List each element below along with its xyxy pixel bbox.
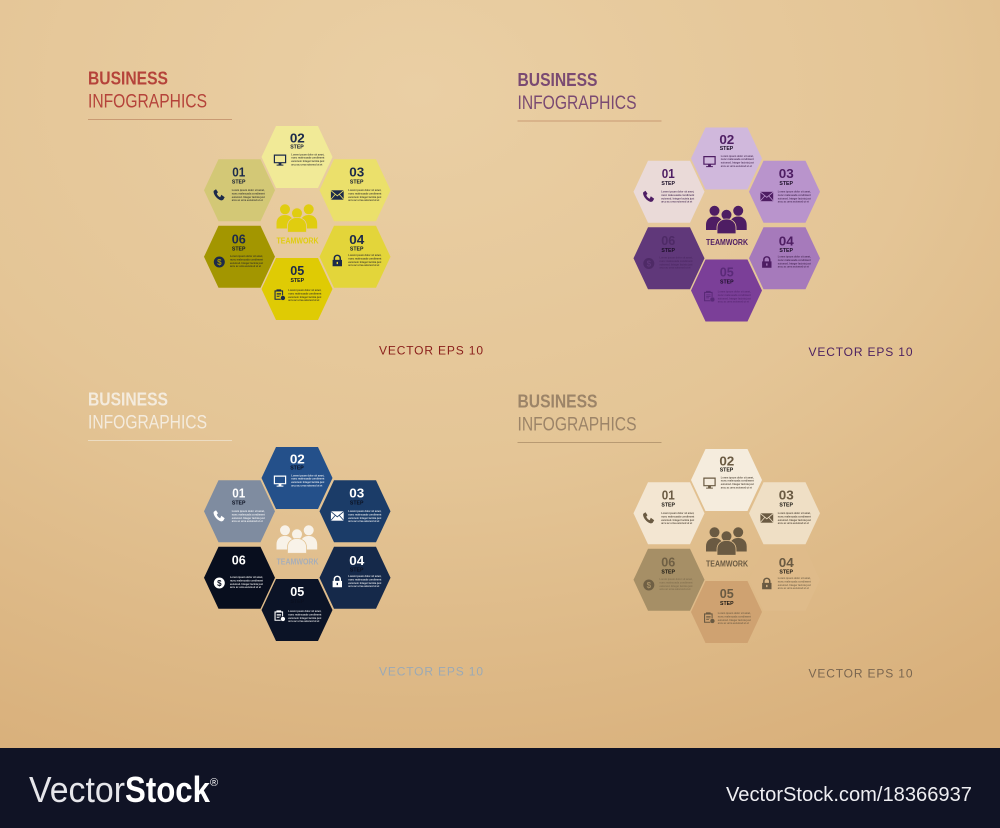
step 01 hexagon <box>204 159 275 221</box>
step 04 hexagon: euismod. Integer lacinia just <box>778 583 811 587</box>
step 01 hexagon: 01 <box>232 165 245 180</box>
icon: teamwork people <box>276 204 317 232</box>
heading: tan business infographics: INFOGRAPHICS <box>518 414 636 436</box>
step 05 hexagon <box>691 260 762 322</box>
step 05 hexagon <box>691 581 762 643</box>
step 02 hexagon: Lorem ipsum dolor sit amet, <box>721 475 754 479</box>
step 04 hexagon: nunc malesuada condiment <box>778 258 811 262</box>
step 04 hexagon: 04 <box>779 555 794 570</box>
step 06 hexagon: euismod. Integer lacinia just <box>230 582 263 586</box>
step 05 hexagon: euismod. Integer lacinia just <box>288 295 321 299</box>
step 03 hexagon <box>320 480 390 542</box>
step 03 hexagon: STEP <box>779 181 794 187</box>
step 02 hexagon <box>262 447 332 509</box>
step 03 hexagon: 03 <box>349 486 364 501</box>
step 05 hexagon: nunc malesuada condiment <box>718 293 751 297</box>
step 03 hexagon: arcu ac urna euismod ut et <box>348 198 379 202</box>
step 02 hexagon: nunc malesuada condiment <box>291 477 324 481</box>
step 06 hexagon: Lorem ipsum dolor sit amet, <box>660 255 693 259</box>
step 03 hexagon: nunc malesuada condiment <box>778 514 811 518</box>
step 06 hexagon <box>634 227 704 289</box>
step 03 hexagon: STEP <box>350 179 364 185</box>
heading: purple business infographics: INFOGRAPHICS <box>518 93 636 114</box>
step 06 hexagon: $ <box>647 581 652 590</box>
step 02 hexagon: euismod. Integer lacinia just <box>291 480 324 484</box>
panel: purple infographic <box>518 70 913 359</box>
step 01 hexagon: 01 <box>662 488 675 503</box>
caption: vector eps 10: VECTOR EPS 10 <box>379 664 483 678</box>
caption: vector eps 10: VECTOR EPS 10 <box>379 344 483 358</box>
step 05 hexagon: nunc malesuada condiment <box>718 614 751 618</box>
step 04 hexagon <box>749 227 820 289</box>
step 04 hexagon: arcu ac urna euismod ut et <box>348 263 379 267</box>
step 04 hexagon: STEP <box>350 567 364 573</box>
step 04 hexagon: euismod. Integer lacinia just <box>348 581 381 585</box>
step 06 hexagon <box>204 226 275 288</box>
step 04 hexagon: 04 <box>779 233 794 248</box>
step 02 hexagon: 02 <box>290 131 305 146</box>
step 02 hexagon: 02 <box>290 452 305 467</box>
step 01 hexagon: nunc malesuada condiment <box>661 193 694 197</box>
step 06 hexagon: nunc malesuada condiment <box>660 259 692 263</box>
step 06 hexagon <box>204 547 275 609</box>
heading: yellow business infographics <box>88 68 232 120</box>
step 04 hexagon: euismod. Integer lacinia just <box>348 260 381 264</box>
step 05 hexagon: arcu ac urna euismod ut et <box>288 298 319 302</box>
step 03 hexagon: 03 <box>349 165 364 180</box>
step 06 hexagon: euismod. Integer lacinia just <box>660 262 692 266</box>
step 01 hexagon: euismod. Integer lacinia just <box>232 516 265 520</box>
step 05 hexagon: 05 <box>720 264 734 280</box>
step 04 hexagon: Lorem ipsum dolor sit amet, <box>348 253 381 257</box>
step 01 hexagon: arcu ac urna euismod ut et <box>232 519 263 523</box>
step 03 hexagon: Lorem ipsum dolor sit amet, <box>778 190 811 194</box>
step 05 hexagon <box>262 258 332 320</box>
step 03 hexagon: STEP <box>779 502 794 508</box>
step 02 hexagon: euismod. Integer lacinia just <box>721 482 754 486</box>
step 01 hexagon: STEP <box>661 181 676 187</box>
step 06 hexagon: arcu ac urna euismod ut et <box>230 585 261 589</box>
heading: yellow business infographics: INFOGRAPHICS <box>88 92 207 112</box>
icon: teamwork people <box>706 527 747 555</box>
step 01 hexagon: 01 <box>662 166 675 181</box>
step 02 hexagon: euismod. Integer lacinia just <box>721 161 754 165</box>
step 05 hexagon: euismod. Integer lacinia just <box>288 616 321 620</box>
step 05 hexagon: nunc malesuada condiment <box>288 291 321 295</box>
step 03 hexagon: euismod. Integer lacinia just <box>778 196 811 200</box>
icon: teamwork people <box>706 206 747 234</box>
caption: vector eps 10: VECTOR EPS 10 <box>808 345 913 359</box>
step 01 hexagon: euismod. Integer lacinia just <box>661 518 694 522</box>
logo: vectorstock: Stock <box>125 769 211 810</box>
label: teamwork: TEAMWORK <box>276 236 319 245</box>
logo: vectorstock: Vector <box>29 769 125 810</box>
step 03 hexagon <box>749 161 820 223</box>
step 04 hexagon: arcu ac urna euismod ut et <box>348 584 379 588</box>
step 02 hexagon: nunc malesuada condiment <box>721 157 754 161</box>
step 01 hexagon: Lorem ipsum dolor sit amet, <box>232 188 265 192</box>
step 06 hexagon: arcu ac urna euismod ut et <box>660 587 690 591</box>
step 03 hexagon: Lorem ipsum dolor sit amet, <box>348 509 381 513</box>
step 06 hexagon: euismod. Integer lacinia just <box>660 584 692 588</box>
step 06 hexagon: STEP <box>661 248 676 254</box>
step 02 hexagon: arcu ac urna euismod ut et <box>721 486 752 490</box>
step 02 hexagon: nunc malesuada condiment <box>291 156 324 160</box>
step 06 hexagon: arcu ac urna euismod ut et <box>230 264 261 268</box>
step 02 hexagon: arcu ac urna euismod ut et <box>721 164 752 168</box>
step 03 hexagon: nunc malesuada condiment <box>348 191 381 195</box>
step 01 hexagon: euismod. Integer lacinia just <box>661 196 694 200</box>
step 03 hexagon: euismod. Integer lacinia just <box>348 195 381 199</box>
step 03 hexagon: arcu ac urna euismod ut et <box>778 200 809 204</box>
heading: tan business infographics <box>518 392 662 443</box>
step 02 hexagon: Lorem ipsum dolor sit amet, <box>721 154 754 158</box>
step 05 hexagon: 05 <box>290 584 304 599</box>
step 06 hexagon: 06 <box>661 554 675 569</box>
step 01 hexagon: STEP <box>661 502 676 508</box>
step 04 hexagon <box>749 549 820 611</box>
step 04 hexagon: 04 <box>349 232 365 247</box>
logo: vectorstock: ® <box>210 777 218 789</box>
step 02 hexagon: euismod. Integer lacinia just <box>291 159 324 163</box>
step 05 hexagon: Lorem ipsum dolor sit amet, <box>288 609 321 613</box>
step 01 hexagon: arcu ac urna euismod ut et <box>232 198 263 202</box>
step 02 hexagon: arcu ac urna euismod ut et <box>291 484 322 488</box>
step 04 hexagon: nunc malesuada condiment <box>348 577 381 581</box>
step 01 hexagon: Lorem ipsum dolor sit amet, <box>661 511 694 515</box>
step 05 hexagon: Lorem ipsum dolor sit amet, <box>718 290 751 294</box>
step 06 hexagon: nunc malesuada condiment <box>230 257 263 261</box>
step 03 hexagon: euismod. Integer lacinia just <box>348 516 381 520</box>
step 03 hexagon: STEP <box>350 500 364 506</box>
heading: tan business infographics: BUSINESS <box>518 392 598 412</box>
step 06 hexagon: $ <box>217 258 222 267</box>
step 04 hexagon: STEP <box>779 248 794 254</box>
step 06 hexagon: Lorem ipsum dolor sit amet, <box>660 577 693 581</box>
step 01 hexagon: STEP <box>232 179 246 185</box>
step 01 hexagon: nunc malesuada condiment <box>232 191 265 195</box>
step 06 hexagon: $ <box>217 579 222 588</box>
heading: yellow business infographics: BUSINESS <box>88 68 168 88</box>
step 06 hexagon <box>634 549 704 611</box>
step 02 hexagon: 02 <box>719 454 734 469</box>
label: teamwork: TEAMWORK <box>276 557 319 566</box>
step 04 hexagon: nunc malesuada condiment <box>348 256 381 260</box>
step 04 hexagon: STEP <box>350 246 364 252</box>
step 01 hexagon: nunc malesuada condiment <box>661 514 694 518</box>
step 06 hexagon: Lorem ipsum dolor sit amet, <box>230 575 263 579</box>
step 05 hexagon: arcu ac urna euismod ut et <box>718 621 749 625</box>
step 05 hexagon: arcu ac urna euismod ut et <box>718 300 749 304</box>
footer bar <box>0 748 1000 828</box>
step 04 hexagon: Lorem ipsum dolor sit amet, <box>778 254 811 258</box>
step 03 hexagon: 03 <box>779 488 794 503</box>
heading: white business infographics: BUSINESS <box>88 390 168 410</box>
step 02 hexagon: STEP <box>290 145 304 151</box>
step 04 hexagon: nunc malesuada condiment <box>778 579 811 583</box>
step 04 hexagon: 04 <box>349 553 365 568</box>
step 04 hexagon: Lorem ipsum dolor sit amet, <box>348 574 381 578</box>
step 06 hexagon: STEP <box>232 246 246 252</box>
step 06 hexagon: $ <box>647 259 652 268</box>
step 01 hexagon: euismod. Integer lacinia just <box>232 195 265 199</box>
step 06 hexagon: nunc malesuada condiment <box>660 580 692 584</box>
step 03 hexagon: arcu ac urna euismod ut et <box>348 519 379 523</box>
caption: vector eps 10: VECTOR EPS 10 <box>808 666 913 680</box>
step 06 hexagon: 06 <box>232 231 246 246</box>
step 05 hexagon: 05 <box>720 586 734 601</box>
step 06 hexagon: euismod. Integer lacinia just <box>230 261 263 265</box>
step 02 hexagon: arcu ac urna euismod ut et <box>291 163 322 167</box>
step 03 hexagon: Lorem ipsum dolor sit amet, <box>348 188 381 192</box>
panel: yellow infographic <box>88 68 483 358</box>
step 06 hexagon: 06 <box>232 552 246 567</box>
step 03 hexagon: 03 <box>779 166 794 181</box>
step 01 hexagon: Lorem ipsum dolor sit amet, <box>232 509 265 513</box>
step 05 hexagon <box>262 579 332 641</box>
step 01 hexagon: 01 <box>232 486 245 501</box>
step 01 hexagon: arcu ac urna euismod ut et <box>661 521 692 525</box>
step 05 hexagon: STEP <box>291 599 305 605</box>
step 04 hexagon: euismod. Integer lacinia just <box>778 261 811 265</box>
step 03 hexagon: euismod. Integer lacinia just <box>778 518 811 522</box>
step 01 hexagon: STEP <box>232 500 246 506</box>
panel: navy infographic <box>88 390 483 678</box>
step 05 hexagon: STEP <box>720 280 734 286</box>
step 02 hexagon: nunc malesuada condiment <box>721 479 754 483</box>
step 04 hexagon: STEP <box>779 569 794 575</box>
step 04 hexagon: arcu ac urna euismod ut et <box>778 586 809 590</box>
step 02 hexagon <box>691 449 762 511</box>
step 01 hexagon <box>634 161 704 223</box>
step 04 hexagon <box>320 547 390 609</box>
step 02 hexagon <box>691 128 762 190</box>
heading: purple business infographics: BUSINESS <box>518 70 598 90</box>
step 05 hexagon: STEP <box>720 601 734 607</box>
step 05 hexagon: nunc malesuada condiment <box>288 612 321 616</box>
step 03 hexagon: arcu ac urna euismod ut et <box>778 521 809 525</box>
step 02 hexagon: STEP <box>290 466 304 472</box>
step 05 hexagon: STEP <box>291 278 305 284</box>
step 04 hexagon: Lorem ipsum dolor sit amet, <box>778 576 811 580</box>
step 02 hexagon: 02 <box>719 132 734 147</box>
step 01 hexagon: arcu ac urna euismod ut et <box>661 200 692 204</box>
heading: white business infographics <box>88 390 232 441</box>
step 02 hexagon: Lorem ipsum dolor sit amet, <box>291 152 324 156</box>
step 01 hexagon <box>204 480 275 542</box>
label: teamwork: TEAMWORK <box>706 238 748 247</box>
heading: white business infographics: INFOGRAPHICS <box>88 412 207 434</box>
heading: purple business infographics <box>518 70 662 122</box>
step 05 hexagon: Lorem ipsum dolor sit amet, <box>718 611 751 615</box>
footer url: VectorStock.com/18366937 <box>726 784 972 806</box>
step 02 hexagon: STEP <box>720 468 734 474</box>
logo: vectorstock <box>29 769 218 810</box>
step 03 hexagon <box>749 482 820 544</box>
step 05 hexagon: Lorem ipsum dolor sit amet, <box>288 288 321 292</box>
step 06 hexagon: STEP <box>661 569 676 575</box>
step 05 hexagon: arcu ac urna euismod ut et <box>288 619 319 623</box>
icon: teamwork people <box>276 525 317 553</box>
label: teamwork: TEAMWORK <box>706 559 748 568</box>
step 04 hexagon: arcu ac urna euismod ut et <box>778 265 809 269</box>
step 06 hexagon: Lorem ipsum dolor sit amet, <box>230 254 263 258</box>
step 05 hexagon: euismod. Integer lacinia just <box>718 296 751 300</box>
step 03 hexagon: Lorem ipsum dolor sit amet, <box>778 511 811 515</box>
step 03 hexagon: nunc malesuada condiment <box>778 193 811 197</box>
step 05 hexagon: euismod. Integer lacinia just <box>718 618 751 622</box>
step 06 hexagon: 06 <box>661 233 675 248</box>
step 06 hexagon: STEP <box>232 567 246 573</box>
step 05 hexagon: 05 <box>290 263 304 278</box>
step 03 hexagon <box>320 159 390 221</box>
step 01 hexagon <box>634 482 704 544</box>
step 01 hexagon: nunc malesuada condiment <box>232 512 265 516</box>
step 06 hexagon: nunc malesuada condiment <box>230 578 263 582</box>
panel: beige infographic <box>518 392 913 680</box>
step 03 hexagon: nunc malesuada condiment <box>348 512 381 516</box>
step 02 hexagon: STEP <box>720 146 734 152</box>
step 04 hexagon <box>320 226 390 288</box>
step 06 hexagon: arcu ac urna euismod ut et <box>660 266 690 270</box>
step 01 hexagon: Lorem ipsum dolor sit amet, <box>661 190 694 194</box>
step 02 hexagon <box>262 126 332 188</box>
step 02 hexagon: Lorem ipsum dolor sit amet, <box>291 473 324 477</box>
